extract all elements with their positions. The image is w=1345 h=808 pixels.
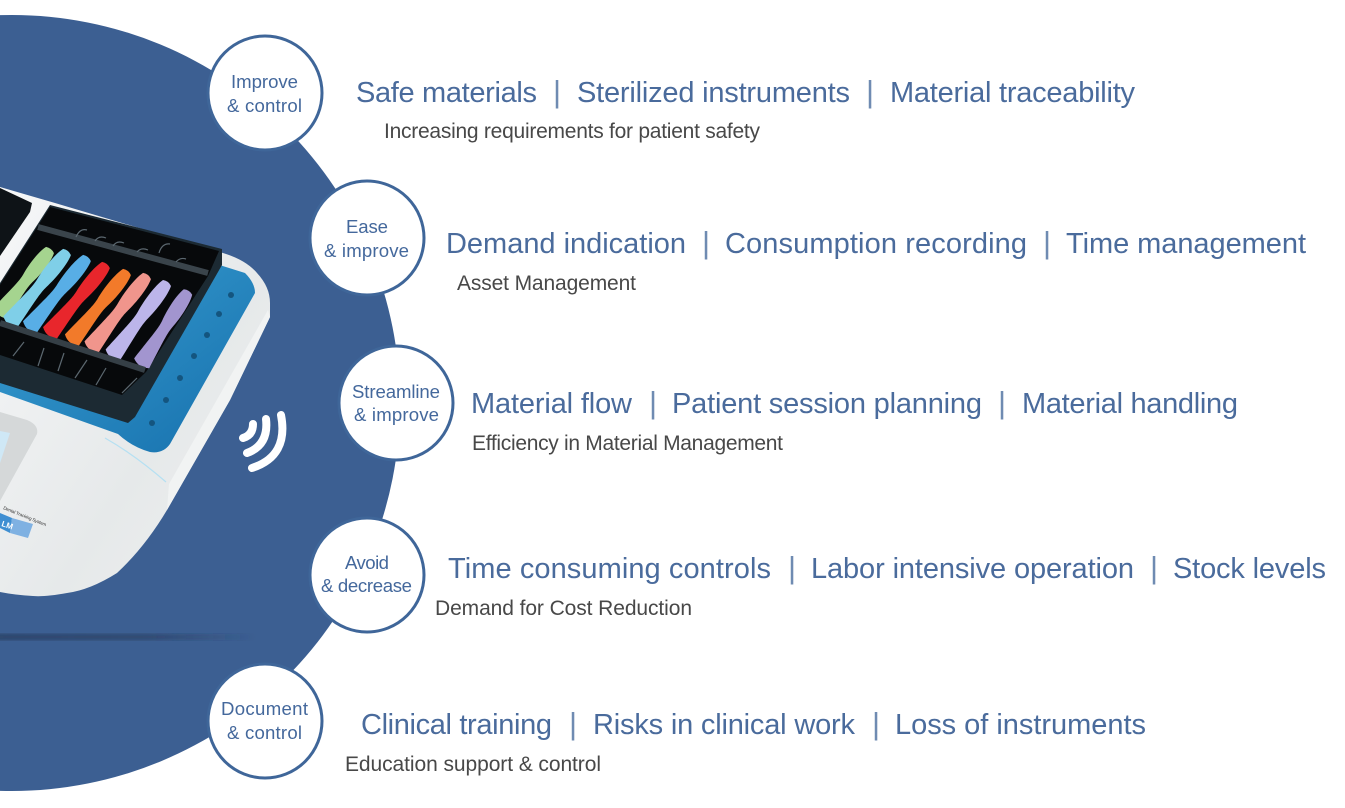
heading items: Time consuming controls xyxy=(448,553,771,585)
blue tray base xyxy=(0,262,255,452)
heading items: Risks in clinical work xyxy=(593,709,856,741)
control screen xyxy=(0,431,10,463)
row 5: document and control xyxy=(208,664,1146,778)
heading items: | xyxy=(649,385,657,420)
heading items: Clinical training xyxy=(361,709,552,741)
heading items: Sterilized instruments xyxy=(577,77,850,109)
row 2: ease and improve xyxy=(310,181,1306,295)
badge: streamline and improve: & improve xyxy=(354,404,439,425)
badge: improve and control xyxy=(208,36,322,150)
left tray xyxy=(0,188,32,256)
tray lower bar xyxy=(0,323,145,370)
heading items: | xyxy=(553,74,561,109)
blue light line xyxy=(105,438,166,482)
badge: avoid and decrease: Avoid xyxy=(345,552,389,573)
icon: wireless signal xyxy=(243,415,282,468)
device shadow xyxy=(0,634,255,640)
subheading: Increasing requirements for patient safety xyxy=(384,120,760,143)
heading items: | xyxy=(569,706,577,741)
heading items: Loss of instruments xyxy=(895,709,1146,741)
base pegs xyxy=(149,292,234,426)
badge: streamline and improve xyxy=(339,346,453,460)
heading items: | xyxy=(866,74,874,109)
badge: ease and improve xyxy=(310,181,424,295)
heading items: Labor intensive operation xyxy=(811,553,1134,585)
device logo: LM xyxy=(0,519,14,532)
device lower ledge xyxy=(167,310,270,510)
heading items: Material handling xyxy=(1022,388,1238,420)
subheading: Asset Management xyxy=(457,272,636,295)
device label: Dental Tracking System xyxy=(3,505,47,527)
heading items: Stock levels xyxy=(1173,553,1326,585)
heading items: | xyxy=(702,225,710,260)
heading items xyxy=(361,706,1146,741)
handpieces xyxy=(0,244,196,371)
subheading: Education support & control xyxy=(345,753,601,776)
heading items xyxy=(356,74,1136,109)
heading items: Patient session planning xyxy=(672,388,982,420)
large blue circle background xyxy=(0,15,400,791)
heading items: Material traceability xyxy=(890,77,1136,109)
control screen bezel xyxy=(0,412,37,501)
heading items: | xyxy=(1150,550,1158,585)
badge: avoid and decrease: & decrease xyxy=(321,575,412,596)
heading items: Demand indication xyxy=(446,228,686,260)
device logo xyxy=(0,513,33,538)
heading items: Consumption recording xyxy=(725,228,1027,260)
tray upper bar xyxy=(38,227,208,273)
badge: document and control: Document xyxy=(221,698,309,719)
row 3: streamline and improve xyxy=(339,346,1238,460)
heading items: | xyxy=(872,706,880,741)
device body xyxy=(0,187,270,596)
badge: improve and control: Improve xyxy=(231,71,298,92)
wire hooks xyxy=(13,230,186,393)
badge: document and control xyxy=(208,664,322,778)
row 4: avoid and decrease xyxy=(310,518,1326,632)
heading items xyxy=(448,550,1326,585)
tray interior xyxy=(0,207,219,395)
badge: ease and improve: Ease xyxy=(346,216,388,237)
subheading: Demand for Cost Reduction xyxy=(435,597,692,620)
heading items xyxy=(446,225,1306,260)
heading items: | xyxy=(1043,225,1051,260)
heading items: Time management xyxy=(1066,228,1306,260)
heading items: Material flow xyxy=(471,388,633,420)
badge: document and control: & control xyxy=(227,722,302,743)
heading items: | xyxy=(788,550,796,585)
heading items: Safe materials xyxy=(356,77,537,109)
dental tracking device xyxy=(0,187,270,596)
heading items: | xyxy=(998,385,1006,420)
badge: improve and control: & control xyxy=(227,95,302,116)
heading items xyxy=(471,385,1238,420)
subheading: Efficiency in Material Management xyxy=(472,432,783,455)
main tray outer wall xyxy=(0,205,222,423)
badge: streamline and improve: Streamline xyxy=(352,381,440,402)
row 1: improve and control xyxy=(208,36,1136,150)
badge: avoid and decrease xyxy=(310,518,424,632)
badge: ease and improve: & improve xyxy=(324,240,409,261)
